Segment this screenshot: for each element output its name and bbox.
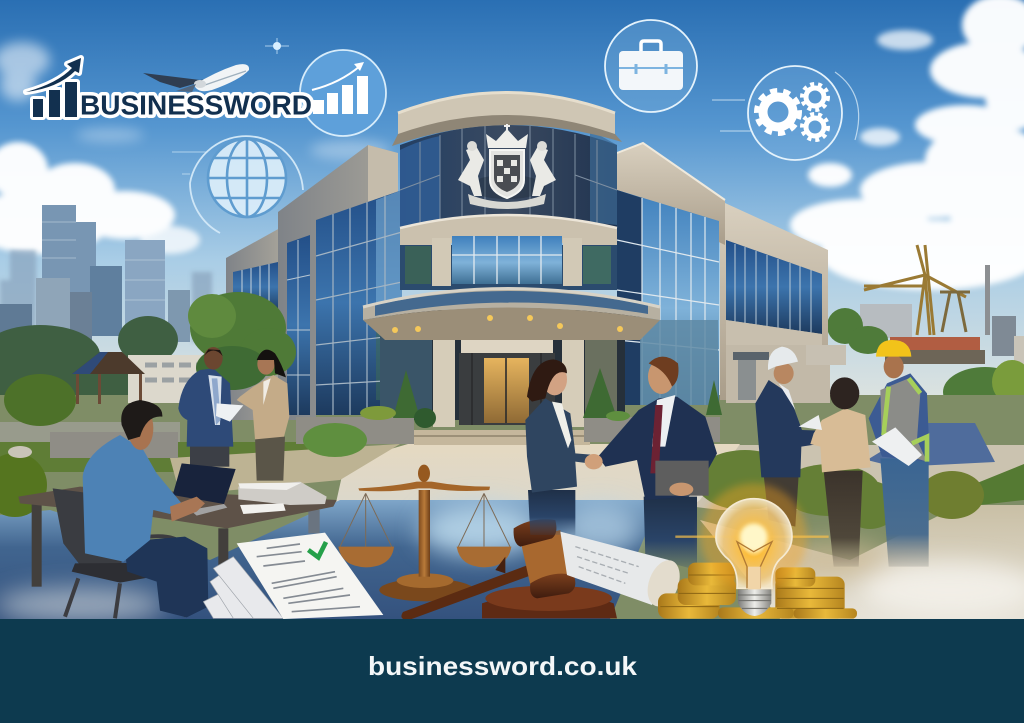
planters bbox=[50, 417, 720, 458]
glow bbox=[700, 483, 807, 590]
bulb screw base bbox=[738, 589, 771, 616]
entrance doors bbox=[459, 333, 555, 425]
sky background bbox=[0, 0, 1024, 420]
icon: gears in circle bbox=[712, 66, 859, 160]
icon: rising bar chart in circle bbox=[300, 50, 386, 136]
rolled blueprint bbox=[560, 532, 686, 611]
desk paper stacks bbox=[238, 482, 327, 514]
seated man at desk bbox=[18, 400, 337, 618]
man in blue suit bbox=[178, 347, 233, 467]
top sheet bbox=[237, 533, 383, 619]
left tower block bbox=[278, 145, 398, 420]
man with white hard hat bbox=[755, 347, 819, 527]
foreground floor left blue bbox=[0, 500, 660, 619]
right wing tan bbox=[720, 203, 828, 400]
business handshake bbox=[525, 357, 717, 570]
woman from behind bbox=[799, 377, 871, 567]
filament bbox=[737, 542, 772, 588]
construction worker bbox=[869, 340, 929, 567]
drum cornice bbox=[398, 92, 615, 140]
footer url: businessword.co.uk bbox=[368, 651, 638, 681]
footer bar bbox=[0, 619, 1024, 723]
office building bbox=[50, 92, 846, 458]
contract document with check mark bbox=[203, 533, 383, 619]
narrow left glass bbox=[287, 235, 310, 415]
woman in beige jacket bbox=[237, 350, 289, 481]
round shrubs bbox=[303, 406, 630, 457]
lower floors bbox=[395, 310, 625, 420]
gold coins and light bulb bbox=[658, 483, 857, 619]
right block tan bbox=[617, 143, 725, 245]
right skyline and crane bbox=[860, 245, 1024, 366]
man in navy suit bbox=[598, 357, 717, 570]
coin edges bbox=[660, 575, 844, 608]
text lines bbox=[257, 544, 360, 612]
background trees bbox=[0, 308, 1024, 438]
coin stacks bbox=[658, 563, 857, 619]
lower central windows bbox=[400, 245, 617, 290]
icon: globe in circle bbox=[172, 136, 303, 233]
gavel head bbox=[495, 519, 575, 598]
plane bbox=[143, 64, 249, 92]
man figure bbox=[83, 400, 208, 617]
green tick bbox=[308, 542, 326, 557]
hazy reflections bbox=[0, 504, 1024, 623]
bulb glass bbox=[716, 499, 792, 588]
clouds bbox=[0, 0, 1024, 290]
tree in front of left wing bbox=[188, 292, 296, 390]
logo mark bbox=[26, 58, 81, 117]
entrance steps bbox=[414, 430, 590, 445]
back left pavilion and low building bbox=[72, 352, 223, 404]
chair bbox=[53, 488, 187, 618]
foreground floor right cream bbox=[700, 505, 1024, 619]
icon: briefcase in circle bbox=[605, 20, 697, 112]
coat of arms bbox=[458, 124, 556, 209]
logo bbox=[26, 58, 312, 120]
canopy bbox=[363, 288, 660, 320]
scales of justice bbox=[338, 465, 511, 601]
held document bbox=[216, 403, 243, 422]
left glass curtain wall bbox=[316, 190, 402, 415]
gavel handle bbox=[401, 562, 540, 620]
sound block bbox=[482, 586, 617, 618]
couple reviewing documents bbox=[178, 347, 289, 481]
canopy lights bbox=[392, 315, 623, 333]
site meeting group bbox=[755, 340, 929, 567]
logo wordmark: BUSINESSWORD bbox=[80, 90, 312, 120]
woman in navy suit bbox=[525, 359, 602, 535]
paper fan bbox=[203, 557, 283, 618]
tent structure bbox=[867, 423, 995, 467]
desk bbox=[18, 487, 337, 587]
laptop bbox=[173, 463, 236, 516]
right glass curtain wall bbox=[617, 190, 719, 405]
ground bbox=[0, 395, 1024, 619]
left city skyline bbox=[0, 205, 212, 342]
drum glass bbox=[400, 125, 617, 237]
sparkle bbox=[265, 38, 289, 54]
gavel and sound block bbox=[482, 519, 617, 618]
clasped hands bbox=[585, 454, 603, 469]
drum mid band bbox=[400, 215, 617, 252]
cone shrubs bbox=[393, 368, 722, 418]
far left wing bbox=[226, 228, 280, 420]
left wing window row bbox=[233, 262, 278, 312]
mid shrubs right and left bbox=[0, 374, 984, 529]
